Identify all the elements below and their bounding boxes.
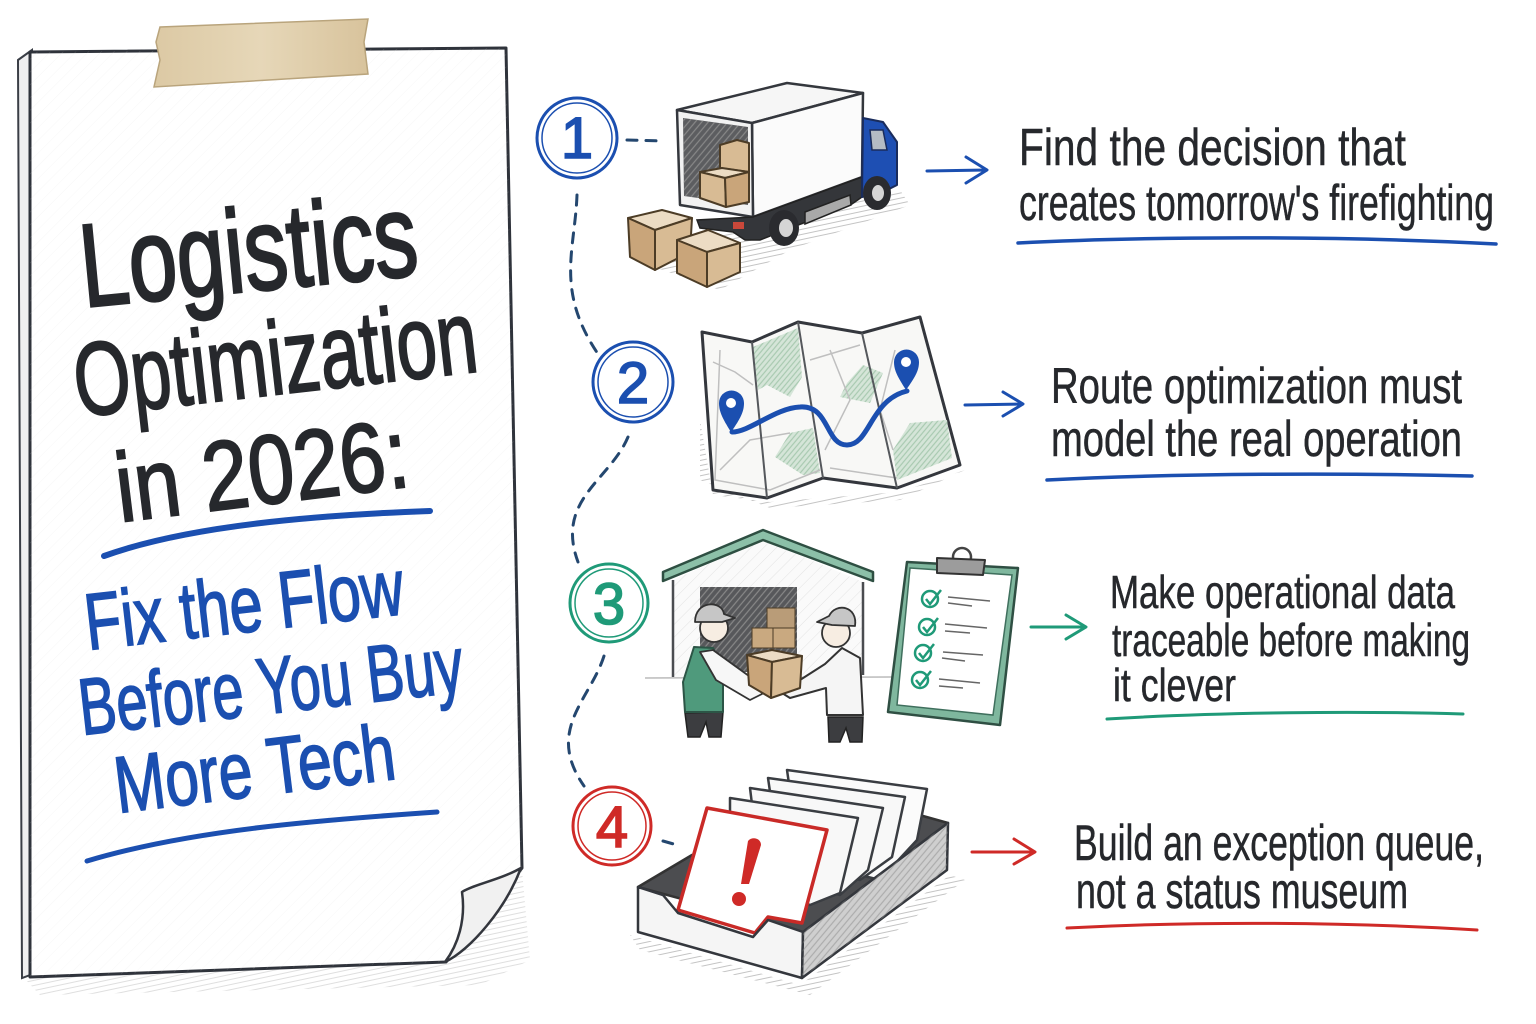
subtitle: [74, 542, 467, 830]
icon: clipboard checklist: [888, 548, 1018, 725]
step 1 badge: [537, 98, 617, 178]
step 3 badge: 3: [593, 572, 625, 637]
step 3 underline: [1107, 712, 1463, 719]
title underline: [104, 511, 430, 556]
step 2 badge: [593, 342, 673, 422]
arrow 1: [927, 157, 987, 183]
step 1 underline: [1018, 238, 1496, 244]
arrow 4: [972, 839, 1035, 864]
arrow 2: [965, 392, 1023, 416]
subtitle: Fix the Flow: [80, 542, 408, 667]
title: [67, 169, 483, 543]
step 4 underline: [1067, 923, 1477, 930]
subtitle underline: [87, 812, 437, 861]
step 3 badge: [570, 564, 648, 642]
icon: curled page corner: [445, 868, 521, 962]
step 2 text: [1051, 358, 1462, 467]
subtitle: More Tech: [109, 707, 400, 830]
step 2 badge: 2: [617, 351, 649, 416]
subtitle: Before You Buy: [74, 620, 467, 752]
step 3 text: it clever: [1113, 659, 1236, 711]
icon: warehouse handover: [645, 530, 895, 742]
step 4 text: [1074, 815, 1484, 919]
icon: masking tape: [154, 19, 368, 87]
step 1 badge: 1: [561, 106, 593, 171]
title: Optimization: [67, 279, 483, 440]
icon: folded map with route: [700, 317, 965, 508]
arrow 3: [1031, 615, 1086, 639]
step 4 badge: [573, 787, 651, 865]
icon: delivery truck with boxes: [628, 83, 910, 290]
icon: exception queue tray: [630, 770, 965, 995]
title: in 2026:: [109, 398, 414, 543]
panel: paper note: [18, 48, 530, 995]
step 1 text: Find the decision that: [1019, 119, 1406, 177]
step 1 text: [1019, 119, 1494, 231]
step 3 text: [1110, 566, 1470, 711]
step 4 badge: 4: [596, 795, 628, 860]
connector: dashed path between steps: [568, 140, 677, 845]
step 2 underline: [1047, 474, 1472, 480]
step 4 text: not a status museum: [1076, 863, 1408, 919]
title: Logistics: [74, 169, 423, 333]
